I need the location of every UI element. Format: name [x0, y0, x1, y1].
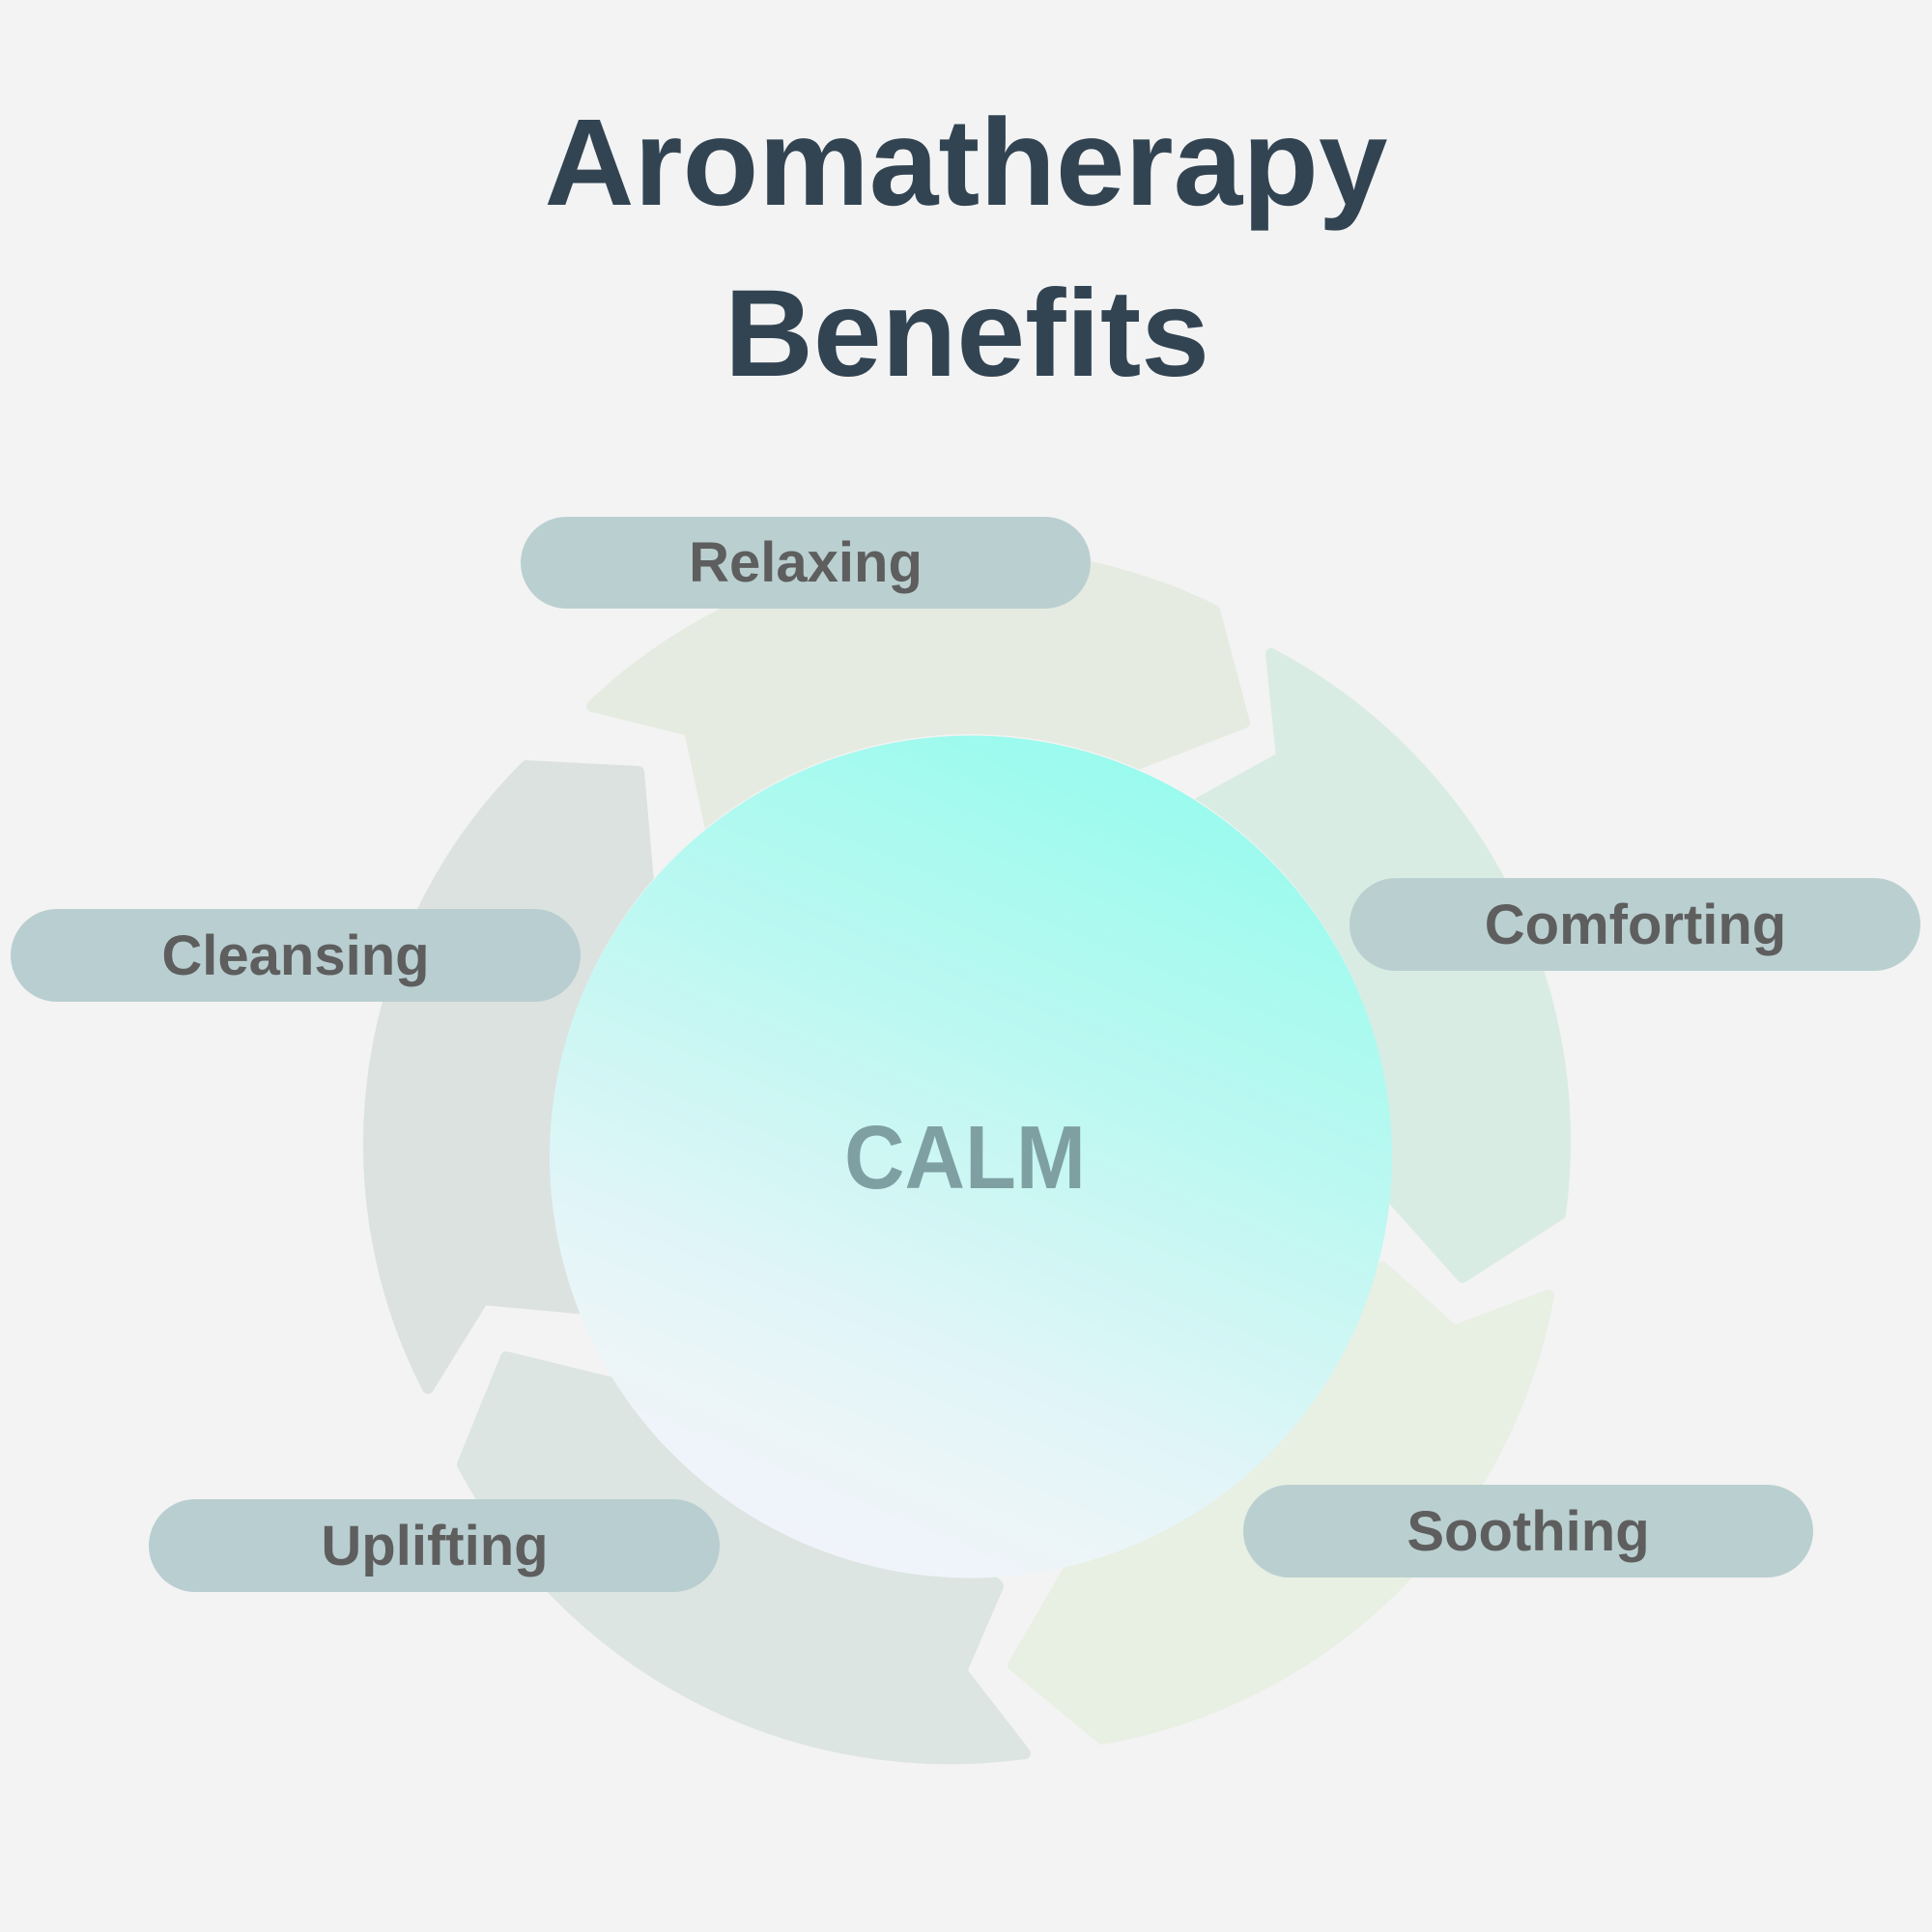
central circle	[550, 734, 1392, 1578]
title	[545, 94, 1387, 403]
pill: comforting	[1350, 878, 1920, 971]
cycle arrows	[369, 554, 1565, 1758]
pill: soothing: Soothing	[1406, 1500, 1650, 1563]
pill: comforting: Comforting	[1485, 894, 1786, 956]
arrow segment: relaxing	[592, 554, 1244, 966]
arrow segment: soothing	[1013, 1267, 1548, 1739]
pill: relaxing	[521, 517, 1091, 609]
pill: uplifting	[149, 1499, 720, 1592]
arrow segment: cleansing	[369, 766, 676, 1388]
title: Benefits	[724, 265, 1209, 403]
pill: relaxing: Relaxing	[689, 531, 923, 594]
title: Aromatherapy	[545, 94, 1387, 232]
pill: uplifting: Uplifting	[321, 1515, 549, 1577]
arrow segment: uplifting	[463, 1357, 1025, 1758]
pill: cleansing	[11, 909, 581, 1002]
pill: soothing	[1243, 1485, 1813, 1577]
center label: CALM	[844, 1107, 1086, 1208]
arrow segment: comforting	[1198, 654, 1565, 1277]
pill: cleansing: Cleansing	[161, 924, 430, 987]
